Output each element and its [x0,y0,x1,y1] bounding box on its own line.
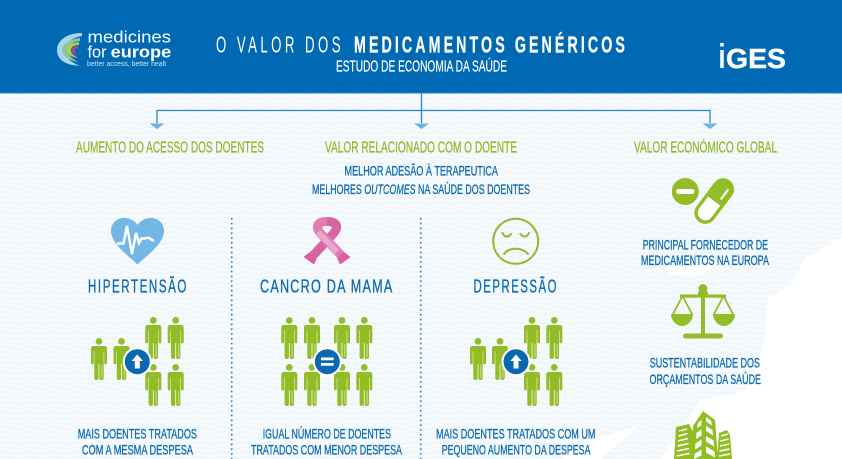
caption: MEDICAMENTOS NA EUROPA [641,252,769,268]
logo: medicines for europe [57,27,171,68]
heading: HIPERTENSÃO [88,276,188,296]
panel: depressão [436,219,596,458]
caption: TRATADOS COM MENOR DESPESA [251,442,402,458]
background map [560,237,842,459]
logo wordmark: medicines [88,27,171,46]
logo: medicines for europe: for [88,43,107,62]
title: MEDICAMENTOS GENÉRICOS [354,31,628,58]
caption [436,425,596,458]
header banner [0,0,842,94]
people group [470,317,562,406]
patient value description: MELHOR ADESÃO À TERAPEUTICA [344,163,498,179]
caption: PRINCIPAL FORNECEDOR DE [643,236,768,252]
caption: ORÇAMENTOS DA SAÚDE [650,371,761,387]
heading: DEPRESSÃO [474,276,558,296]
logo swirl [57,33,82,66]
caption [641,236,769,268]
caption: COM A MESMA DESPESA [82,442,193,458]
icon: scales [671,284,735,338]
logo: IGES: i [718,38,726,76]
section heading: patient value: VALOR RELACIONADO COM O DOENTE [325,139,517,156]
panel: cancro da mama [251,222,402,458]
caption: MAIS DOENTES TRATADOS COM UM [436,425,596,441]
logo: medicines for europe: better access, better healt [87,61,166,68]
people group [281,317,372,406]
title [216,31,628,58]
connector arrows [150,93,718,129]
caption: IGUAL NÚMERO DE DOENTES [263,425,391,441]
icon: sad face [493,219,538,264]
caption: PEQUENO AUMENTO DA DESPESA [442,442,591,458]
icon: pills [672,176,736,226]
caption: MAIS DOENTES TRATADOS [78,425,197,441]
icon: buildings [674,411,732,459]
patient value description: MELHORES OUTCOMES NA SAÚDE DOS DOENTES [312,181,530,197]
logo: IGES: GES [726,43,786,74]
people group [91,317,184,406]
patient value description [312,163,530,197]
icon: heart [111,218,164,264]
section heading: access: AUMENTO DO ACESSO DOS DOENTES [76,139,264,156]
panel: hipertensão [78,218,197,458]
caption: SUSTENTABILIDADE DOS [650,354,760,370]
panel: valor económico [641,176,769,459]
subtitle: ESTUDO DE ECONOMIA DA SAÚDE [336,58,507,76]
title: O VALOR DOS [216,32,344,58]
heading: CANCRO DA MAMA [260,276,394,296]
icon: pink ribbon [304,222,350,264]
caption [650,354,761,387]
caption [78,425,197,458]
caption [251,425,402,458]
logo: medicines for europe: europe [111,43,171,62]
